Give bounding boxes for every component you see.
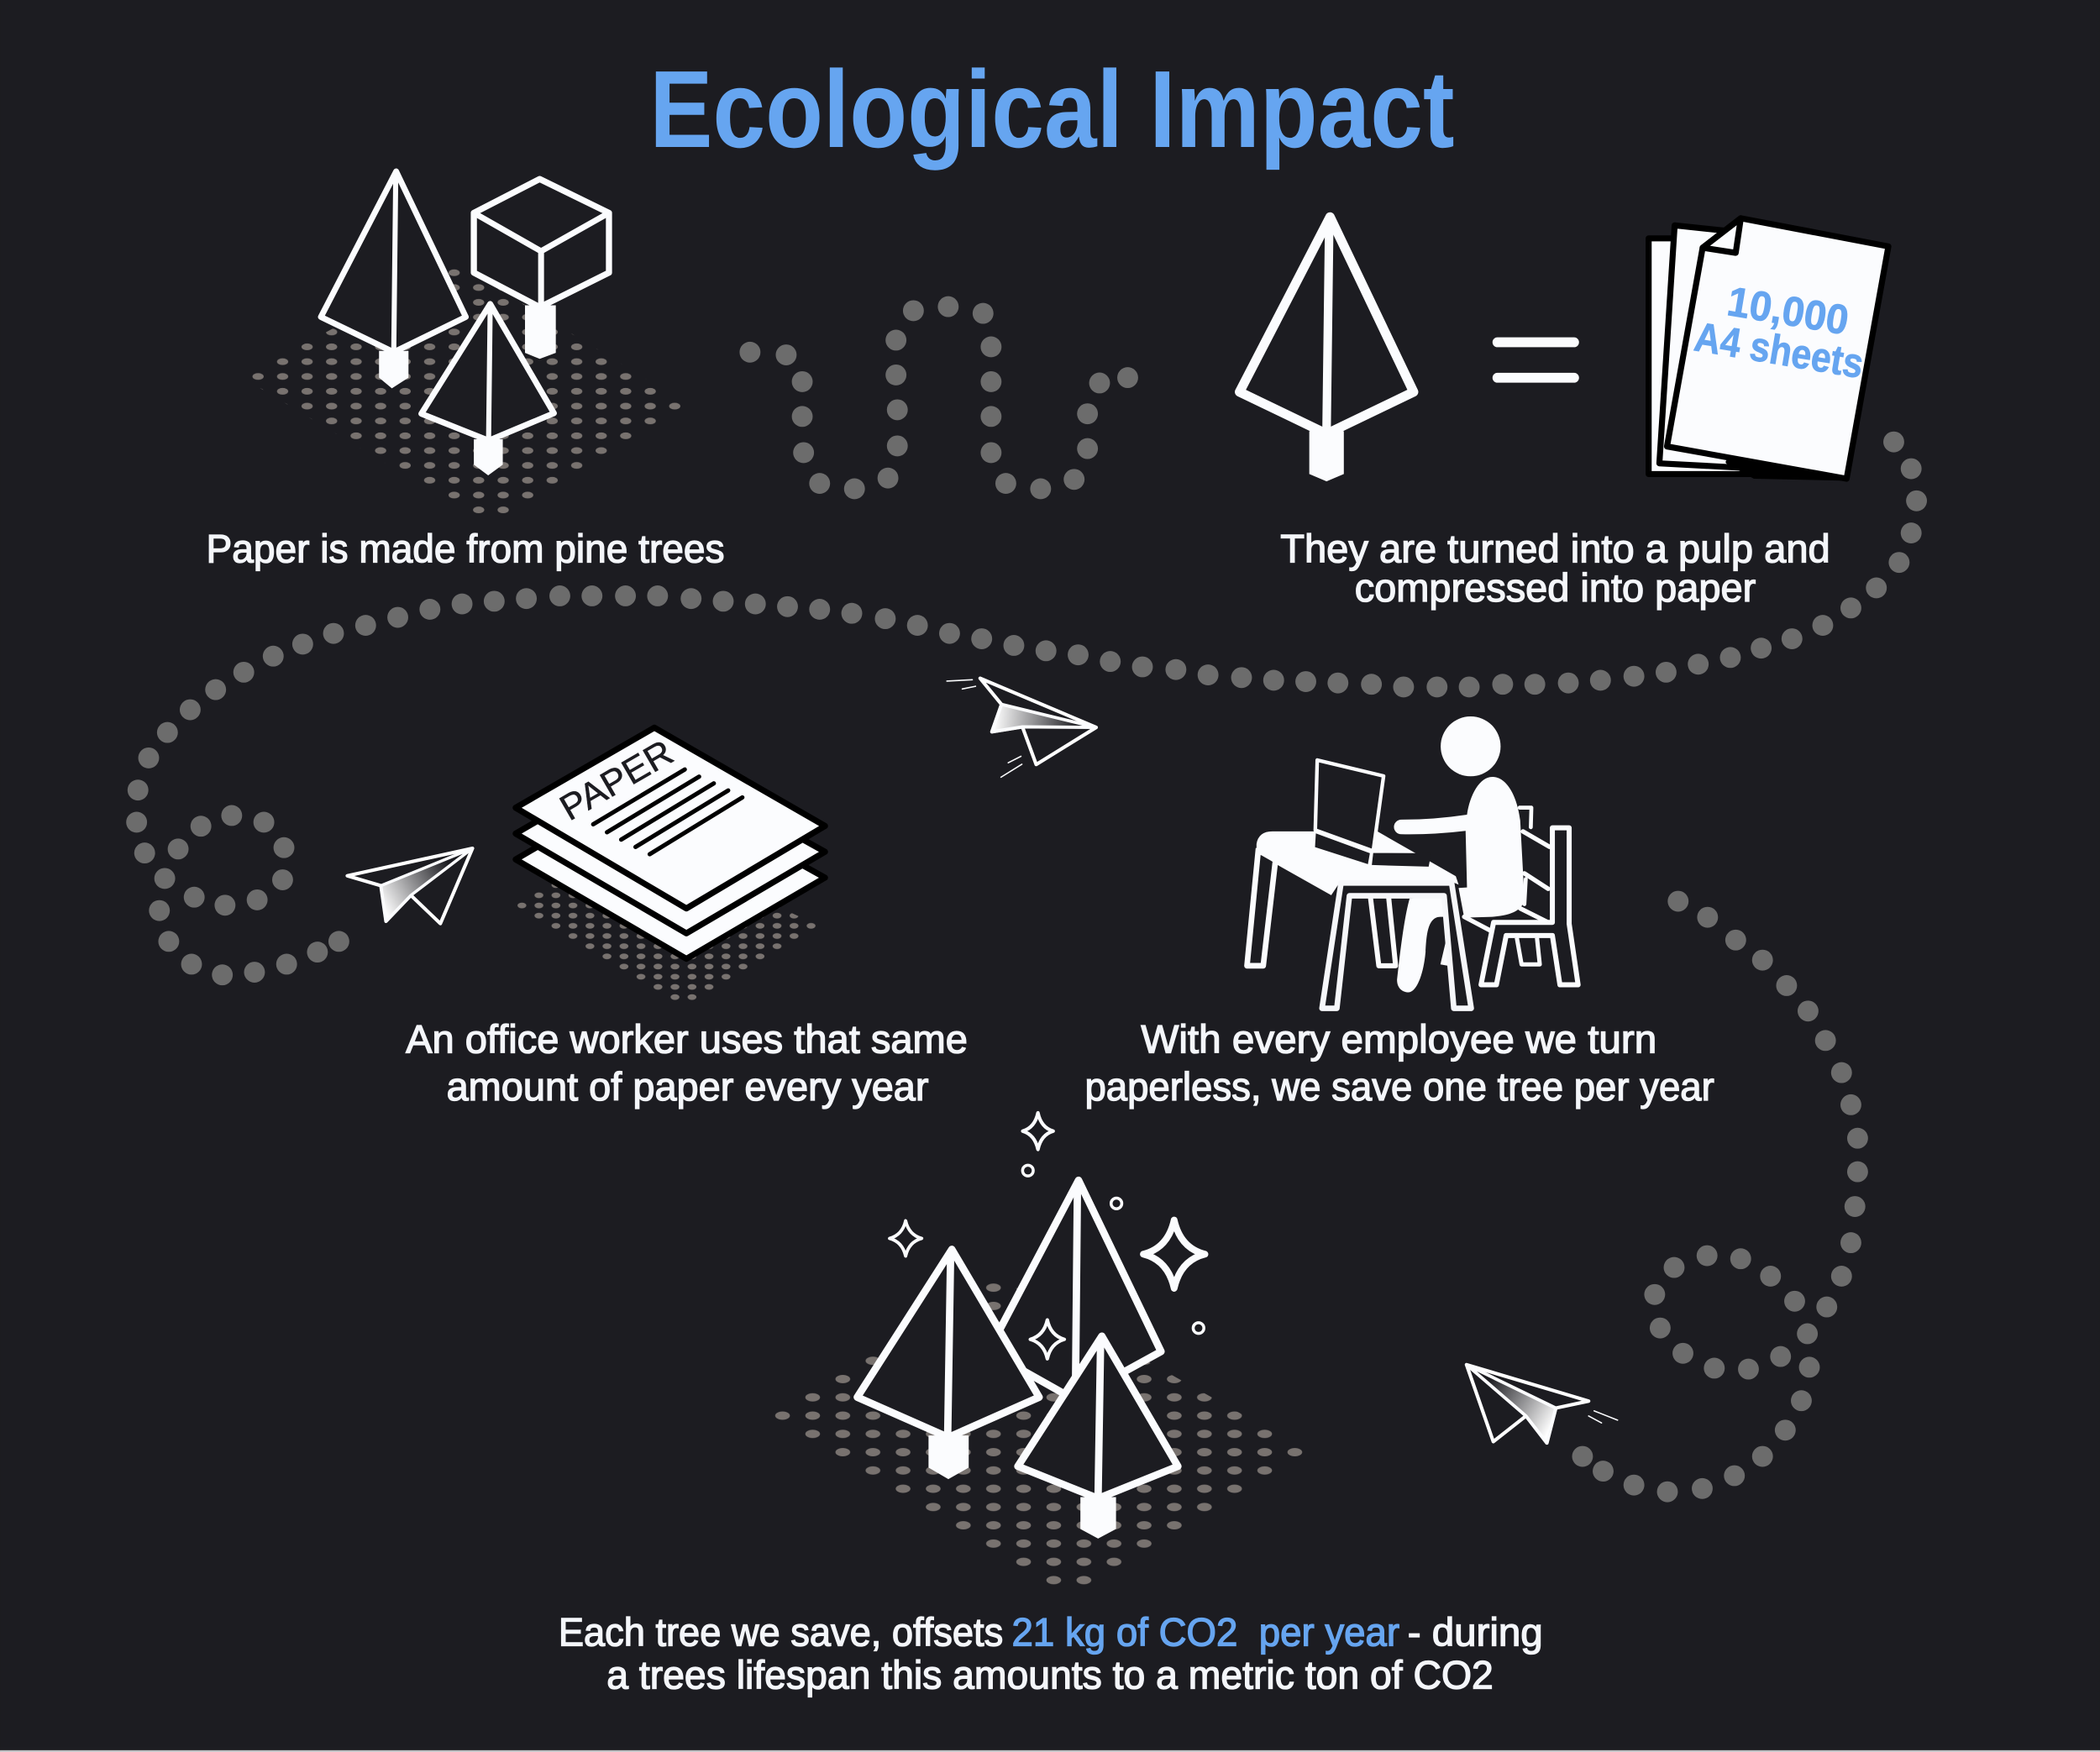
icon: single tree (1240, 217, 1414, 481)
left tree (858, 1250, 1039, 1479)
paper plane: right (1467, 1365, 1618, 1443)
caption: office worker: An office worker uses that same (406, 1017, 968, 1062)
desk top (1257, 831, 1458, 895)
sparkle: top (1022, 1113, 1053, 1150)
sheet count label (1691, 278, 1866, 387)
caption: office worker: amount of paper every year (447, 1064, 929, 1109)
desk front frame (1322, 883, 1471, 1009)
dotted path: right side with spiral (1583, 901, 1857, 1492)
top sheet (516, 727, 825, 909)
caption: CO2 offset: - during (1408, 1609, 1543, 1654)
title: Ecological Impact (649, 48, 1455, 170)
back tree (989, 1180, 1161, 1399)
middle sheet (516, 755, 825, 933)
caption: paperless: With every employee we turn (1141, 1017, 1656, 1062)
desk back legs (1247, 848, 1395, 966)
caption: office worker (406, 1017, 968, 1109)
caption: CO2 offset: Each tree we save, offsets (559, 1609, 1003, 1654)
PAPER label: PAPER (554, 732, 680, 829)
equals sign (1493, 338, 1579, 383)
icon: person at desk (1247, 716, 1578, 1009)
bottom sheet (516, 781, 825, 959)
caption: pulp: They are turned into a pulp and (1280, 527, 1830, 571)
caption: pulp: compressed into paper (1355, 565, 1756, 610)
isometric dot grid under trees (242, 262, 690, 526)
front tree (1018, 1336, 1178, 1539)
caption: CO2 offset: a trees lifespan this amounts to a metric ton of CO2 (606, 1653, 1494, 1697)
caption: paperless (1084, 1017, 1714, 1109)
dot grid under paper (513, 857, 820, 1007)
sparkle: middle (1031, 1320, 1064, 1359)
caption: paperless: paperless, we save one tree per year (1084, 1064, 1714, 1109)
sheet count label: A4 sheets (1691, 314, 1866, 387)
torso and arm (1394, 777, 1525, 918)
laptop (1315, 760, 1431, 867)
paper plane: left (347, 848, 473, 924)
icon: pine trees group (242, 171, 690, 526)
person legs (1397, 896, 1456, 993)
icon: saved trees with sparkles (768, 1113, 1310, 1598)
dot grid under trees (768, 1277, 1310, 1598)
text lines (593, 769, 743, 854)
chair (1464, 808, 1578, 985)
sheet count label: 10,000 (1725, 278, 1852, 344)
sparkle: left (890, 1220, 921, 1256)
highlighted amount: 21 kg of CO2 per year (1012, 1609, 1399, 1654)
caption: pulp (1280, 527, 1830, 610)
small tree (422, 304, 554, 475)
paper plane: centre (947, 679, 1096, 777)
dotted path: top wiggle (750, 307, 1127, 489)
cube-shaped tree (474, 179, 609, 359)
caption: pine trees: Paper is made from pine trees (207, 527, 725, 571)
icon: paper stack (513, 727, 825, 1007)
icon: stack of A4 sheets (1649, 218, 1888, 479)
head (1441, 716, 1500, 776)
caption: CO2 offset (559, 1609, 1543, 1697)
sparkle: large (1143, 1220, 1205, 1288)
small circles (1022, 1165, 1204, 1334)
dotted path: long sweep from right to left spiral (137, 442, 1917, 975)
tall tree (321, 171, 466, 388)
